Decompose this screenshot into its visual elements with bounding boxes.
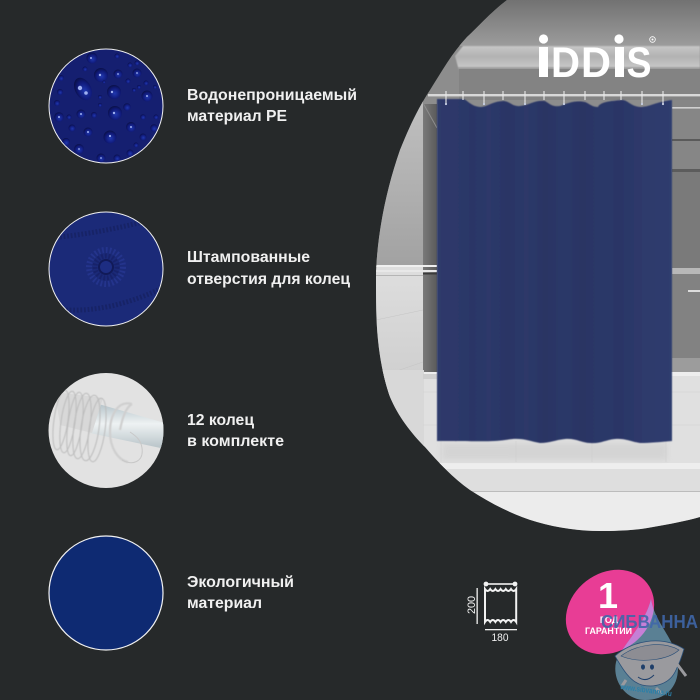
text: waterproof: Водонепроницаемый [187,87,357,104]
rods [428,94,700,96]
watermark: sibvanna bathtub: www.sibvanna.ru [619,682,673,698]
curtain [437,99,672,443]
curtain rings [445,91,664,105]
logo: IDDIS: D [551,39,580,87]
badge: one year warranty [549,552,671,672]
text: eco material: материал [187,595,262,612]
logo: IDDIS: D [581,39,611,87]
icon: stamped ring holes [48,211,164,327]
icon: curtain rod with rings [48,373,165,488]
icon: eco material swatch [49,536,163,650]
text: eco material: Экологичный [187,574,294,591]
icon: water drops on fabric [48,48,164,164]
watermark drop [615,599,678,700]
badge: one year warranty: 1 [598,575,618,616]
icon: curtain size 180x200: 200 [466,596,478,614]
upper back wall [459,69,700,100]
logo: IDDIS [539,34,655,87]
text: twelve rings: 12 колец [187,412,254,429]
text: waterproof: материал PE [187,108,287,125]
icon: curtain size 180x200 [466,582,517,644]
badge: one year warranty: ГАРАНТИИ [585,626,632,636]
text: stamped holes: Штампованные [187,249,310,266]
watermark tub [615,641,684,686]
ceiling wall [459,0,700,46]
icon: curtain size 180x200: 180 [492,632,508,644]
photo: bathroom with curtain [370,0,700,540]
floor [473,492,700,531]
badge: one year warranty: ГОД [600,615,619,625]
watermark: sibvanna bathtub [601,599,698,700]
text: stamped holes: отверстия для колец [187,271,350,288]
left niche [423,104,437,374]
shadow under curtain [443,444,666,458]
bathtub [423,372,700,376]
right wall [672,100,700,375]
left wall lower tiles [376,266,423,396]
logo: IDDIS: S [626,39,652,87]
cornice [455,46,700,69]
left wall upper [376,102,423,265]
text: twelve rings: в комплекте [187,433,284,450]
